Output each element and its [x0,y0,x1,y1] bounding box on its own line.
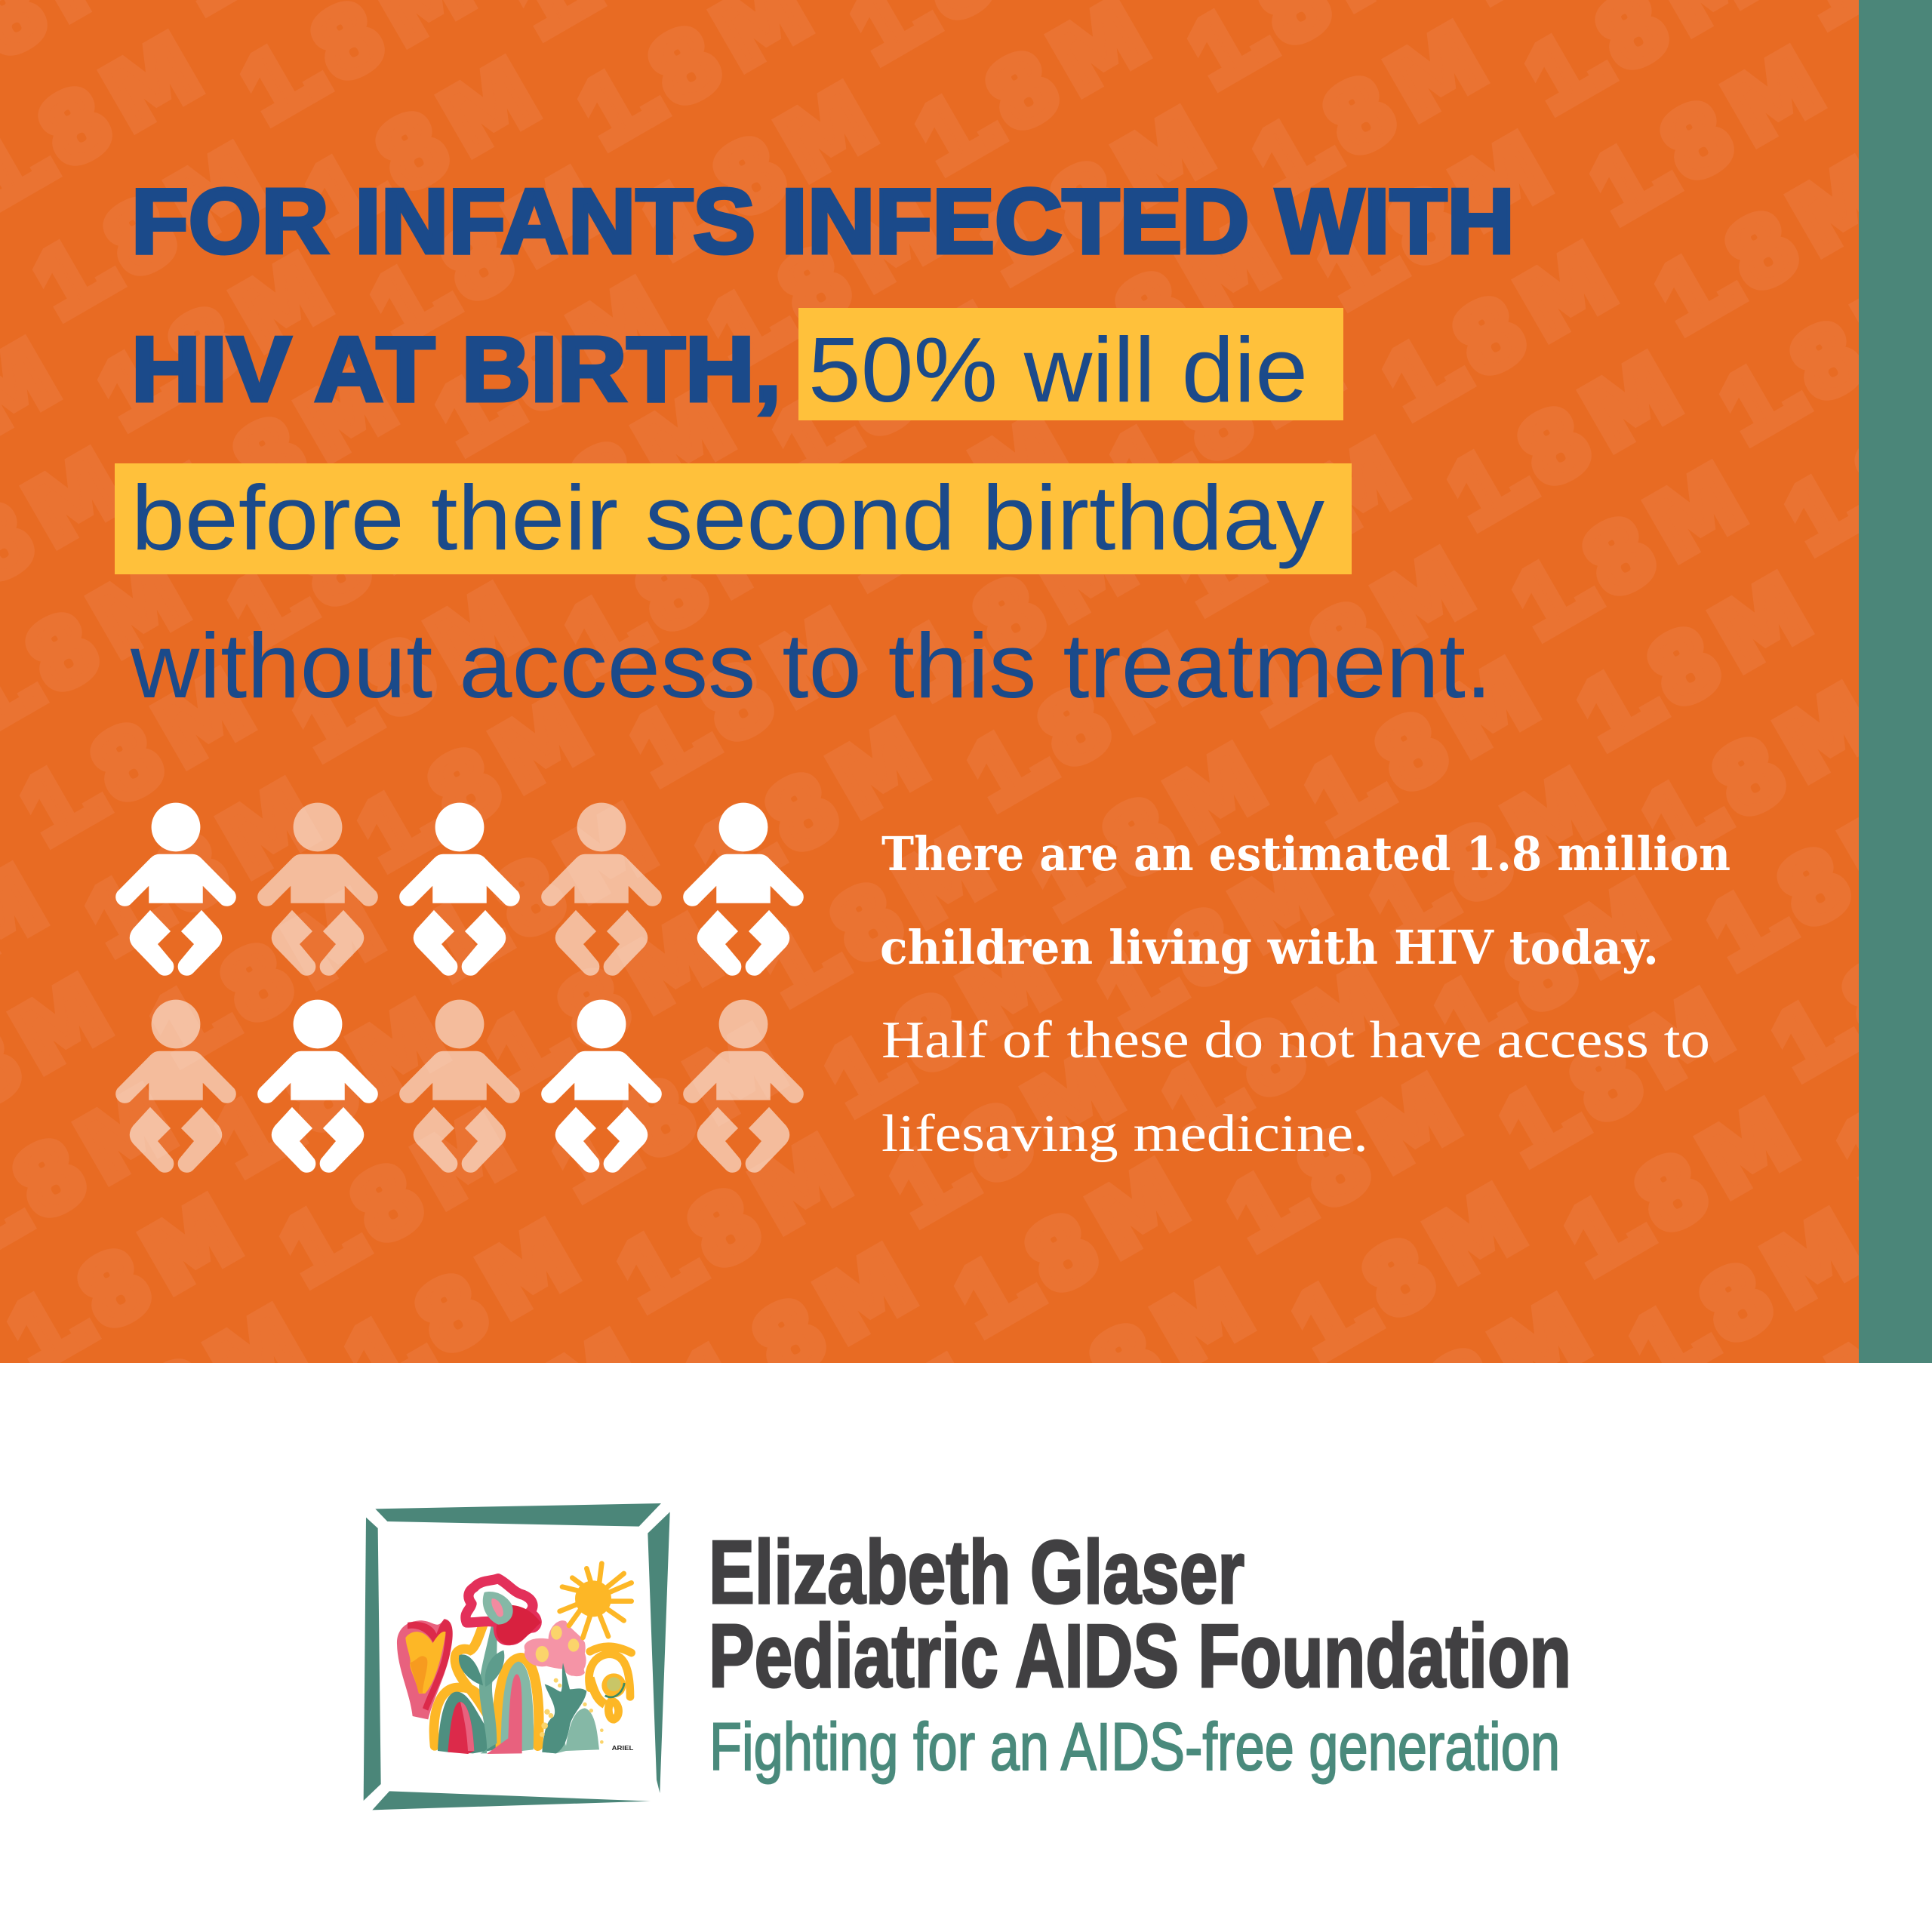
panel: orange background with 1.8M watermark: 1.8M [1081,835,1346,1049]
panel: orange background with 1.8M watermark: 1.8M [472,896,736,1109]
panel: orange background with 1.8M watermark: 1.8M [329,1201,593,1415]
panel: orange background with 1.8M watermark: 1.8M [666,1226,931,1440]
organisation name [709,1522,1571,1706]
panel: orange background with 1.8M watermark: 1.8M [1302,114,1566,328]
panel: orange background with 1.8M watermark: 1.8M [1237,4,1501,217]
light statement line 2: lifesaving medicine. [881,1105,1368,1163]
panel: orange background with 1.8M watermark: 1.8M [549,480,814,694]
panel: orange background with 1.8M watermark: 1.8M [1549,1081,1813,1294]
text block: children living with HIV [880,826,1730,1163]
highlight box 1 [798,308,1343,420]
baby 7 [258,1000,377,1172]
panel: orange background with 1.8M watermark: 1.8M [485,370,749,583]
panel: orange background with 1.8M watermark: 1.8M [1146,946,1411,1159]
panel: orange background with 1.8M watermark: 1.8M [1094,309,1358,523]
panel: orange background with 1.8M watermark: 1.8M [1211,1056,1475,1269]
panel: orange background with 1.8M watermark: 1.8M [134,871,398,1084]
baby 8 [400,1000,519,1172]
panel: orange background with 1.8M watermark: 1.8M [1029,199,1294,413]
painting: sun [560,1564,632,1638]
panel: orange background with 1.8M watermark: 1.8M [679,700,943,914]
panel: orange background with 1.8M watermark: 1.8M [5,651,269,864]
painting: red flower [466,1579,541,1644]
panel: orange background with 1.8M watermark: 1.8M [17,125,281,338]
panel: orange background with 1.8M watermark: 1.8M [199,981,463,1195]
panel: orange background with 1.8M watermark: 1.8M [601,1116,866,1330]
panel: orange background with 1.8M watermark: 1.8M [1574,29,1838,242]
panel: orange background with 1.8M watermark: 1.8M [1069,1361,1333,1575]
highlighted line 3: before their second birthday [131,466,1324,569]
panel: orange background with 1.8M watermark: 1.8M [1367,224,1631,438]
panel: orange background with 1.8M watermark: 1.8M [1626,665,1890,878]
panel: orange background with 1.8M watermark: 1.8M [874,1031,1138,1244]
panel: orange background with 1.8M watermark: 1.8M [809,921,1073,1134]
baby 1 [116,803,235,975]
panel: orange background with 1.8M watermark: 1.8M [939,1141,1203,1355]
painting: small yellow flower [589,1647,632,1719]
panel: orange background with 1.8M watermark: 1.8M [614,590,878,804]
baby 6 [116,1000,235,1172]
painting: low plant [542,1663,599,1753]
panel: orange background with 1.8M watermark: 1.8M [627,64,891,278]
panel: orange background with 1.8M watermark: 1.8M [407,786,671,999]
panel: orange background with 1.8M watermark: 1.8M [952,615,1216,829]
panel: orange background with 1.8M watermark: 1.8M [964,89,1229,303]
panel: orange background with 1.8M watermark: 1.8M [1561,555,1826,768]
panel: orange background with 1.8M watermark: 1.8M [887,505,1151,718]
heading line 1: FOR INFANTS INFECTED WITH [131,170,1515,272]
painting: small arch [438,1692,496,1753]
panel: orange background with 1.8M watermark: 1.8M [1614,1191,1878,1404]
tagline: Fighting for an AIDS-free generation [709,1709,1560,1784]
panel: orange background with 1.8M watermark: 1.8M [147,345,411,558]
frame [364,1503,670,1810]
panel: orange background with 1.8M watermark: 1.8M [82,235,346,448]
panel: orange background with 1.8M watermark: 1.8M [692,174,956,388]
panel: orange background with 1.8M watermark: 1.8M [757,285,1021,498]
panel: orange background with 1.8M watermark: 1.8M [1497,445,1761,658]
panel: orange background with 1.8M watermark: 1.8M [277,565,541,779]
name line 1: Elizabeth Glaser [709,1522,1244,1623]
highlight box 2 [115,463,1352,574]
painting: pink flower [525,1620,586,1676]
panel: orange background with 1.8M watermark: 1.8M [342,675,606,889]
panel: orange background with 1.8M watermark: 1.8M [731,1337,995,1550]
panel: teal side stripe [1859,0,1932,1363]
panel: orange background with 1.8M watermark: 1.8M [1159,420,1423,633]
bold statement line 2: children living with HIV today. [880,920,1659,975]
panel: orange background with 1.8M watermark: 1.8M [1017,725,1281,939]
painting: red flower stem [459,1626,504,1753]
panel: orange background with 1.8M watermark: 1.8M [420,260,684,473]
panel: orange background with 1.8M watermark: 1.8M [264,1091,528,1305]
painting: large arch [498,1662,534,1751]
panel: orange background with 1.8M watermark: 1.8M [1004,1251,1268,1465]
panel: orange background with 1.8M watermark: 1.8M [57,1287,321,1500]
heading line 4: without access to this treatment. [130,614,1492,717]
panel: orange background with 1.8M watermark: 1.8M [290,39,554,253]
baby 9 [542,1000,661,1172]
heading [115,170,1515,717]
baby 4 [542,803,661,975]
panel: orange background with 1.8M watermark: 1.8M [212,455,476,669]
panel: orange background with 1.8M watermark: 1.8M [1224,530,1488,743]
painting: heart [397,1619,453,1719]
panel: orange background with 1.8M watermark: 1.8M [1354,750,1618,964]
painting: yellow dots [540,1678,604,1744]
painting: yellow arches [434,1625,539,1746]
panel: orange background with 1.8M watermark: 1.8M [822,395,1086,608]
panel: orange background with 1.8M watermark: 1.8M [744,811,1008,1024]
bold statement line 1: There are an estimated 1.8 million [881,826,1730,881]
baby 10 [684,1000,803,1172]
panel: orange background with 1.8M watermark: 1.8M [1419,860,1683,1074]
panel: orange background with 1.8M watermark: 1.8M [394,1312,658,1525]
logo mark: framed child's painting [364,1503,670,1810]
painting: artist signature: ARIEL [612,1744,633,1752]
highlighted statistic: 50% will die [808,318,1308,421]
light statement line 1: Half of these do not have access to [881,1011,1710,1069]
pictogram: ten babies, half highlighted [116,803,803,1172]
panel: orange background with 1.8M watermark: 1.8M [69,761,334,974]
baby 5 [684,803,803,975]
panel: orange background with 1.8M watermark: 1.8M [537,1006,801,1220]
panel: orange background with 1.8M watermark: 1.8M [1484,971,1748,1184]
panel: orange background with 1.8M watermark: 1.8M [1639,139,1903,352]
panel: orange background with 1.8M watermark: 1.8M [1341,1276,1605,1490]
baby 2 [258,803,377,975]
panel: orange background with 1.8M watermark: 1.8M [1276,1166,1540,1380]
panel: orange background with 1.8M watermark: 1.8M [1289,640,1553,854]
name line 2: Pediatric AIDS Foundation [709,1606,1571,1706]
panel: orange background with 1.8M watermark: 1.8M [1432,334,1696,548]
heading line 2: HIV AT BIRTH, [131,318,781,420]
baby 3 [400,803,519,975]
panel: orange background with 1.8M watermark: 1.8M [355,149,619,363]
